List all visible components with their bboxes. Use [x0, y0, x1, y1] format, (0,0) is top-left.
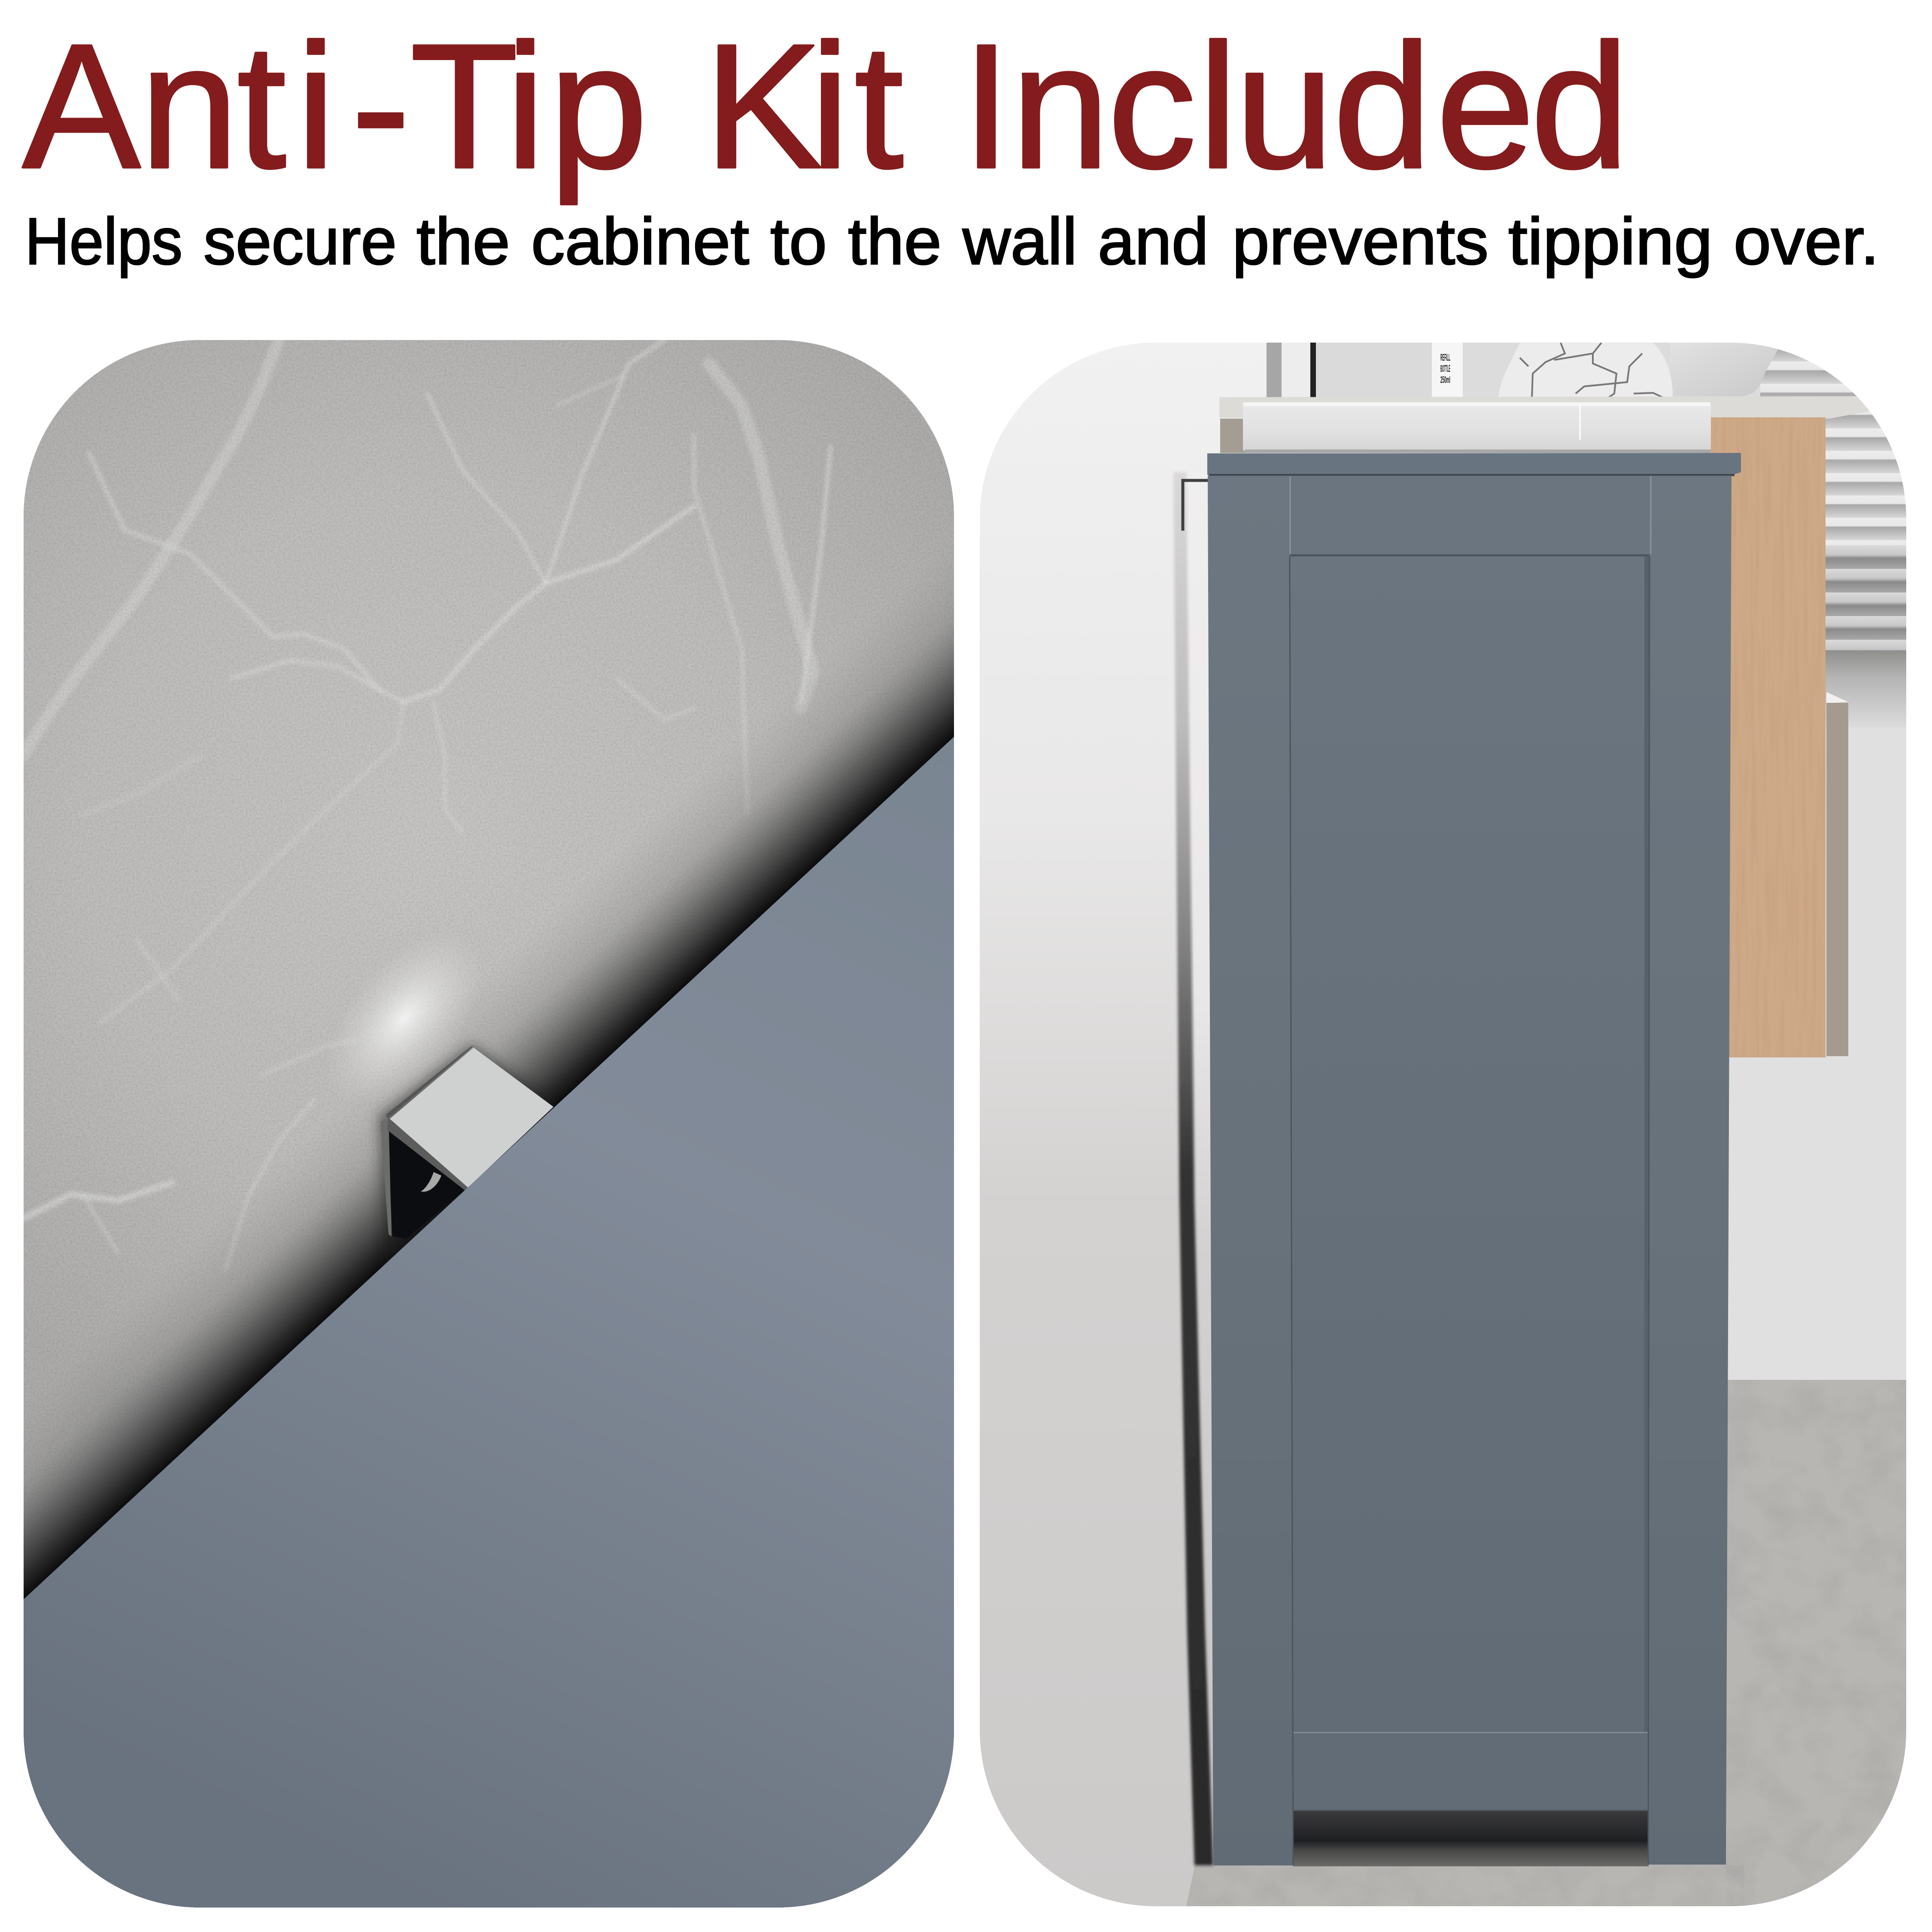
shadow along cabinet edge	[24, 340, 954, 1628]
bracket shadow	[378, 1043, 558, 1271]
title: Anti-Tip Kit Included	[22, 7, 1629, 206]
shadow below blinds	[1826, 650, 1907, 728]
stone panel	[1826, 692, 1848, 1056]
counter dark end	[1220, 419, 1246, 453]
cabinet left stile	[1208, 476, 1293, 1865]
gap between cabinet and wall	[1173, 472, 1213, 1865]
wall on left	[980, 343, 1267, 1906]
stile seams	[1290, 477, 1651, 1865]
panel: anti-tip bracket close-up	[24, 340, 954, 1908]
subtitle: secure	[204, 204, 397, 278]
subtitle: the	[416, 204, 510, 278]
cabinet bottom rail	[1293, 1732, 1649, 1810]
bowl	[1670, 343, 1782, 396]
subtitle: Helps	[25, 204, 182, 278]
strip between gap and cabinet	[1186, 472, 1213, 1777]
bottle	[1316, 343, 1463, 399]
subtitle: the	[848, 204, 942, 278]
subtitle: cabinet	[531, 204, 749, 278]
top rail shadow	[1290, 554, 1649, 556]
bottom rail highlight	[1293, 1732, 1649, 1733]
marble surface grain	[24, 340, 954, 1619]
background behind sink	[1245, 343, 1777, 446]
bottle: REFILL	[1440, 352, 1450, 363]
under-cabinet recess	[1293, 1810, 1649, 1866]
panel inner shade	[1644, 556, 1649, 1733]
anti-tip bracket wire	[1183, 480, 1209, 531]
subtitle: prevents	[1232, 204, 1488, 278]
cabinet right stile	[1648, 476, 1732, 1865]
bracket: dark interior	[387, 1130, 465, 1239]
light glow above bracket	[295, 904, 513, 1133]
subtitle: to	[770, 204, 827, 278]
subtitle: wall	[962, 204, 1077, 278]
sink basin	[1243, 402, 1711, 453]
bottle: BOTTLE	[1440, 363, 1450, 374]
counter slab	[1219, 396, 1868, 419]
concrete floor	[1186, 1380, 1908, 1906]
cabinet centre panel	[1290, 556, 1649, 1733]
cabinet surface	[24, 737, 954, 1908]
rolled towel	[1498, 343, 1673, 401]
bracket: top plate	[390, 1048, 553, 1188]
shelf items background: left slats	[1267, 343, 1316, 398]
cabinet top rail	[1290, 476, 1649, 556]
cabinet top slab	[1207, 453, 1741, 476]
bracket: side flange	[380, 1118, 392, 1236]
background wall on right	[1726, 680, 1906, 1380]
window blinds	[1760, 343, 1907, 680]
marble veins	[24, 340, 831, 1270]
bracket: top edge	[386, 1046, 474, 1118]
subtitle: tipping	[1508, 204, 1713, 278]
panel: cabinet side view	[980, 343, 1908, 1906]
marble wall surface	[24, 340, 954, 1628]
bracket: screw glint	[421, 1172, 441, 1192]
wood panel	[1711, 417, 1826, 1057]
subtitle: and	[1098, 204, 1209, 278]
bottle: 250ml	[1440, 374, 1450, 385]
subtitle: over.	[1734, 204, 1879, 278]
bracket: lower edge	[387, 1118, 468, 1191]
